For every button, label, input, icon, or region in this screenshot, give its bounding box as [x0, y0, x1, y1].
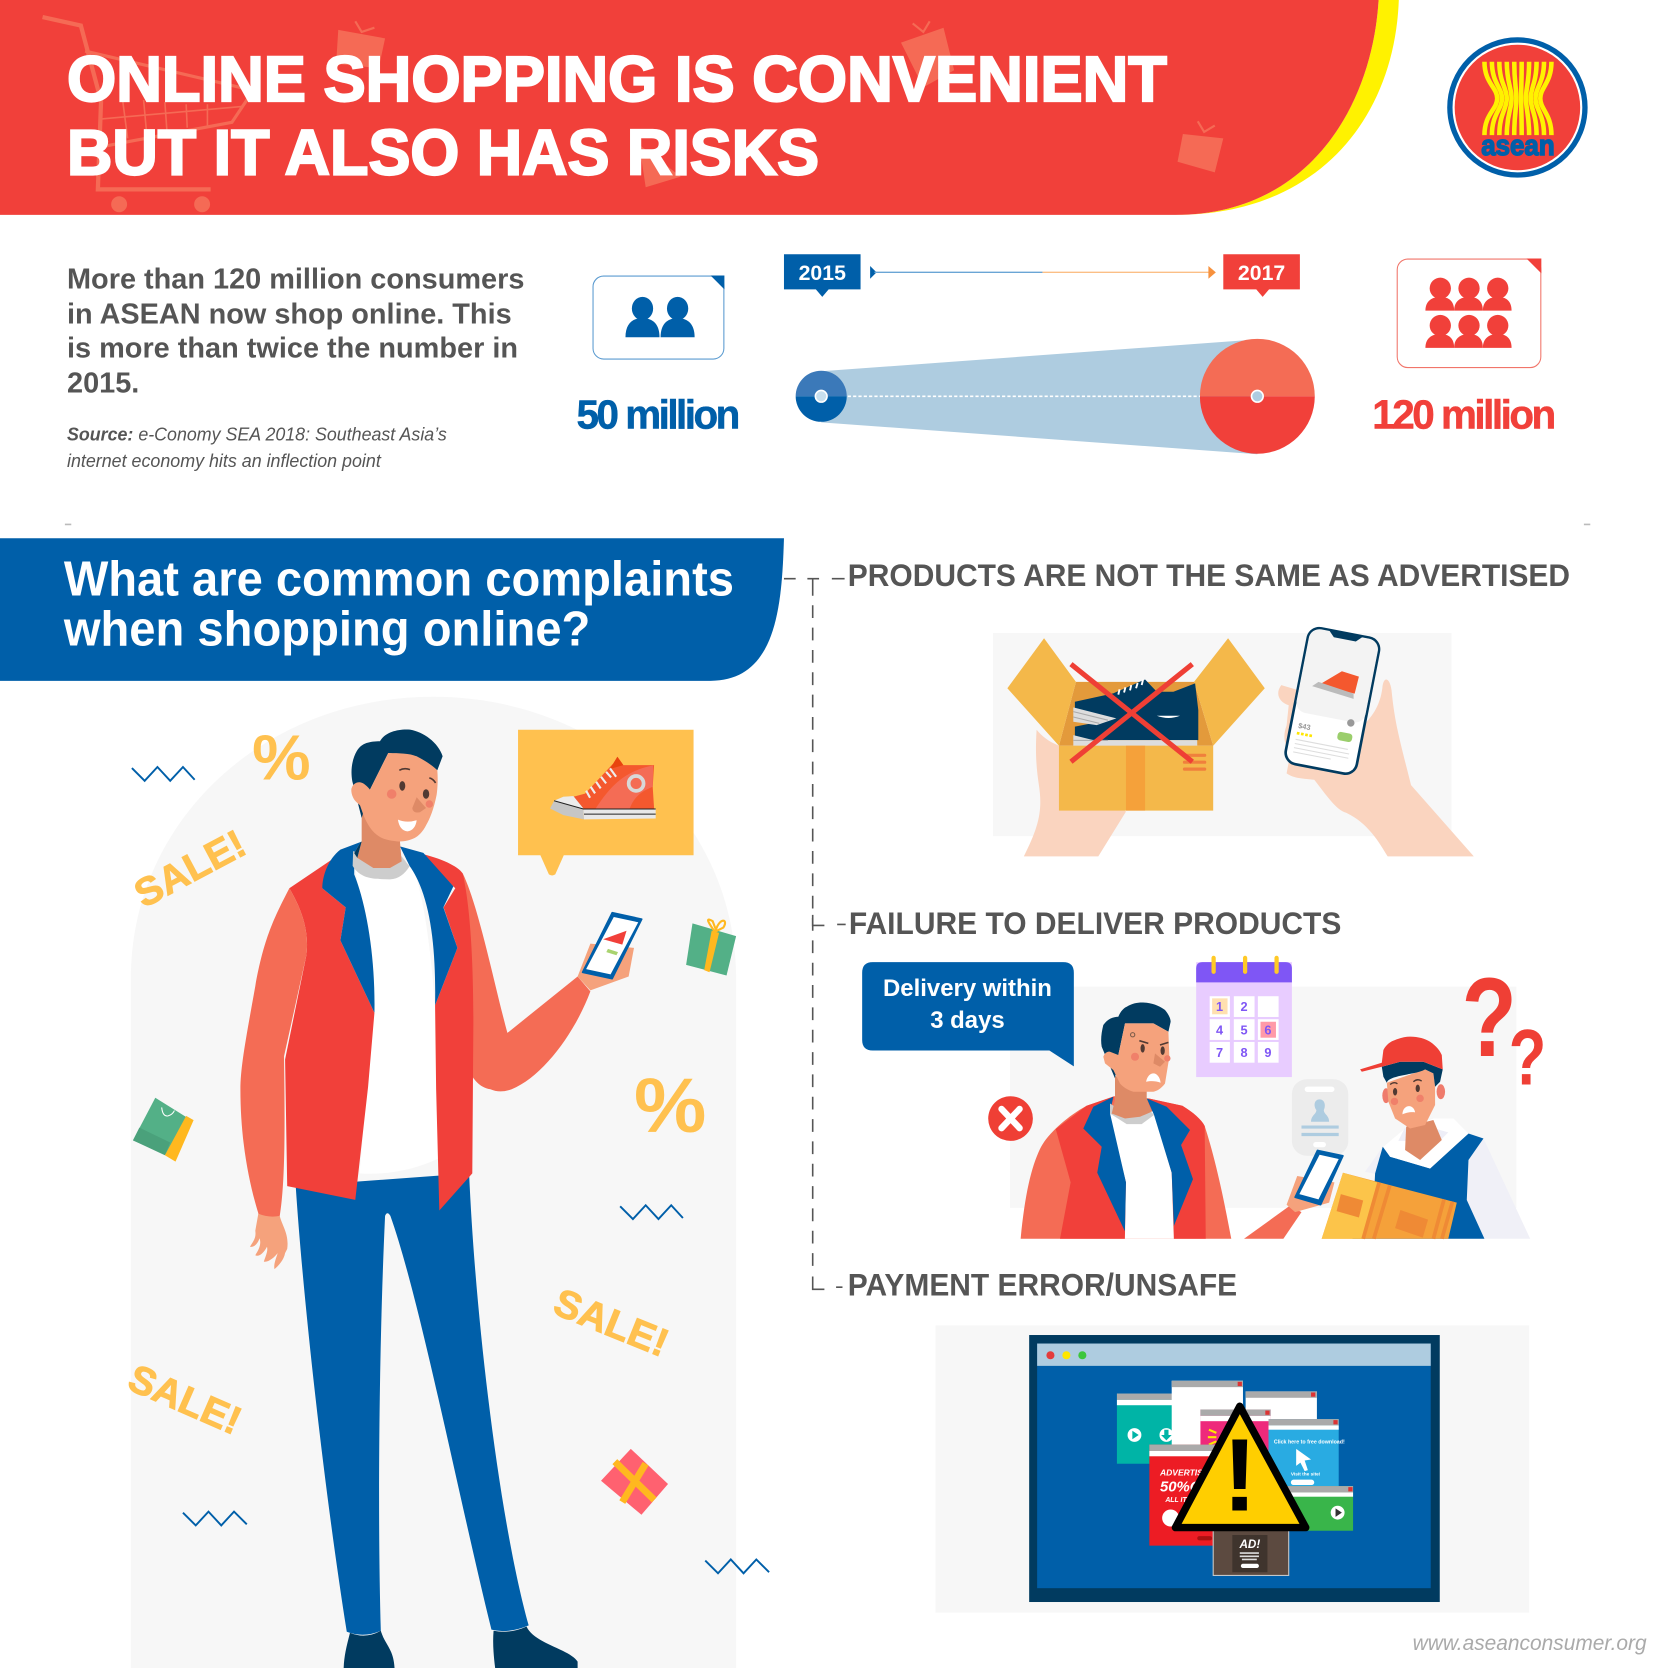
banner: common complaints heading: [0, 538, 784, 681]
icon: profile card: [1292, 1079, 1348, 1156]
face: [351, 753, 438, 842]
popup: pink: [1200, 1409, 1271, 1463]
icon: phone showing red sneaker: $43: [1297, 721, 1311, 732]
heading: failure to deliver: FAILURE TO DELIVER PRODUCTS: [849, 905, 1341, 941]
icon: ASEAN logo: [1450, 40, 1585, 175]
decorative sale words: %: [634, 1064, 706, 1149]
decorative sale words: [122, 722, 706, 1444]
icon: browser monitor: [1029, 1335, 1440, 1602]
intro paragraph: [67, 263, 524, 400]
icon: calendar: 2: [1240, 999, 1248, 1014]
title: ONLINE SHOPPING IS CONVENIENT: [67, 43, 1167, 115]
icon: parcel: [1322, 1173, 1457, 1239]
footer url: www.aseanconsumer.org: [1413, 1631, 1647, 1655]
icon: right hand: [1278, 680, 1474, 856]
arrow: timeline 2015 to 2017: [870, 266, 1216, 279]
hair: [352, 729, 443, 818]
tag: 2017: 2017: [1238, 261, 1285, 285]
source note: internet economy hits an inflection point: [67, 451, 382, 471]
icon: red sneaker: [550, 757, 656, 819]
banner: common complaints heading: What are common complaints: [64, 553, 734, 607]
icon: open box with wrong shoes: [1007, 638, 1265, 811]
character: delivery person: [1244, 1037, 1530, 1239]
icon: question marks: ?: [1462, 954, 1517, 1080]
popup: red advertising: ADVERTISING: [1159, 1467, 1218, 1477]
heading: payment error: PAYMENT ERROR/UNSAFE: [848, 1267, 1237, 1303]
icon: calendar: 5: [1240, 1023, 1248, 1038]
icon: green gift: [686, 920, 736, 975]
banner: common complaints heading: when shopping online?: [63, 603, 590, 657]
title: [67, 43, 1167, 188]
icon: left hand holding box: [1024, 730, 1126, 856]
popup: brown ad: [1213, 1529, 1289, 1575]
callout: delivery within 3 days: 3 days: [930, 1007, 1005, 1034]
panel: products not as advertised: [993, 626, 1474, 856]
icon: question marks: [1462, 954, 1546, 1101]
character: smiling shopper: [240, 729, 642, 1668]
intro paragraph: is more than twice the number in: [67, 332, 518, 364]
popup: red advertising: [1149, 1445, 1222, 1546]
icon: gift watermarks: [336, 21, 1223, 187]
heading: products not as advertised: PRODUCTS ARE NOT THE SAME AS ADVERTISED: [848, 557, 1570, 593]
decorative sale words: SALE!: [127, 822, 253, 916]
popup: teal: [1117, 1394, 1183, 1464]
source note: [67, 424, 447, 471]
icon: ASEAN logo: asean: [1481, 130, 1555, 162]
callout: sneaker speech bubble: [518, 730, 694, 875]
popup: red advertising: 50%OFF: [1160, 1479, 1220, 1495]
popup: red advertising: ALL ITEMS: [1164, 1497, 1202, 1504]
source note: Source: e-Conomy SEA 2018: Southeast Asia’s: [67, 424, 447, 444]
decorative sale words: SALE!: [548, 1280, 675, 1366]
jacket left panel: [285, 857, 374, 1200]
title: BUT IT ALSO HAS RISKS: [67, 116, 819, 188]
icon: six people card 2017: [1397, 259, 1541, 368]
shirt: [354, 862, 439, 1174]
icon: warning triangle: !: [1223, 1418, 1257, 1533]
icon: calendar: 8: [1240, 1045, 1248, 1060]
panel: failure to deliver: [862, 954, 1546, 1239]
icon: two people card 2015: [593, 276, 724, 359]
icon: calendar: 6: [1264, 1023, 1272, 1038]
tag: 2017: [1223, 254, 1300, 297]
panel: payment error: [936, 1325, 1529, 1613]
popup: blue: Click here to free download!: [1274, 1440, 1345, 1446]
decorative sale words: %: [252, 722, 311, 794]
decorative zigzags: [132, 767, 769, 1573]
icon: red cross: [1071, 664, 1192, 762]
intro paragraph: in ASEAN now shop online. This: [67, 298, 512, 330]
icon: warning triangle: [1175, 1406, 1306, 1533]
character: annoyed customer: [1021, 1002, 1231, 1239]
shoes: [344, 1626, 578, 1668]
stat: 120 million: 120 million: [1372, 392, 1556, 438]
intro paragraph: 2015.: [67, 368, 139, 400]
tag: 2015: [784, 254, 861, 297]
stat: 50 million: 50 million: [577, 392, 740, 438]
popup: blue: [1269, 1419, 1345, 1489]
jacket lapels: [322, 842, 457, 1013]
icon: calendar: 9: [1264, 1045, 1272, 1060]
tag: 2015: 2015: [799, 261, 846, 285]
neck and collar: [353, 851, 410, 879]
icon: phone showing red sneaker: [1284, 626, 1381, 776]
icon: green shopping bag: [133, 1098, 194, 1162]
hand with phone: [578, 944, 634, 990]
popup: green: [1284, 1486, 1353, 1531]
legs: [296, 1173, 529, 1635]
icon: calendar: 1: [1216, 999, 1223, 1014]
icon: shopping cart watermark: [43, 17, 253, 211]
header banner: [0, 0, 1399, 215]
icon: calendar: 4: [1216, 1023, 1224, 1038]
popup: brown ad: AD!: [1238, 1538, 1260, 1551]
callout: delivery within 3 days: Delivery within: [883, 975, 1052, 1002]
jacket right panel: [419, 853, 473, 1211]
intro paragraph: More than 120 million consumers: [67, 263, 524, 295]
panel: shopper illustration: [122, 697, 769, 1668]
left sleeve: [240, 888, 307, 1217]
icon: mini sneaker: [1318, 671, 1359, 694]
popup: blue: Visit the site!: [1291, 1471, 1321, 1477]
popup: white windows: [1172, 1381, 1317, 1451]
icon: calendar: 7: [1216, 1045, 1223, 1060]
icon: question marks: ?: [1509, 1013, 1546, 1101]
icon: phone showing sneaker: [583, 913, 642, 979]
icon: navy shoes: [1073, 679, 1198, 746]
icon: calendar: [1196, 958, 1292, 1077]
icon: red error circle: [988, 1096, 1033, 1141]
icon: arm and phone: [1244, 1206, 1301, 1239]
chart: growth cone 50 to 120 million: [796, 339, 1315, 454]
icon: pink gift: [601, 1449, 668, 1515]
left hand: [250, 1213, 288, 1269]
decorative sale words: SALE!: [122, 1356, 248, 1444]
right sleeve and arm: [463, 873, 590, 1091]
callout: delivery within 3 days: [862, 962, 1074, 1066]
